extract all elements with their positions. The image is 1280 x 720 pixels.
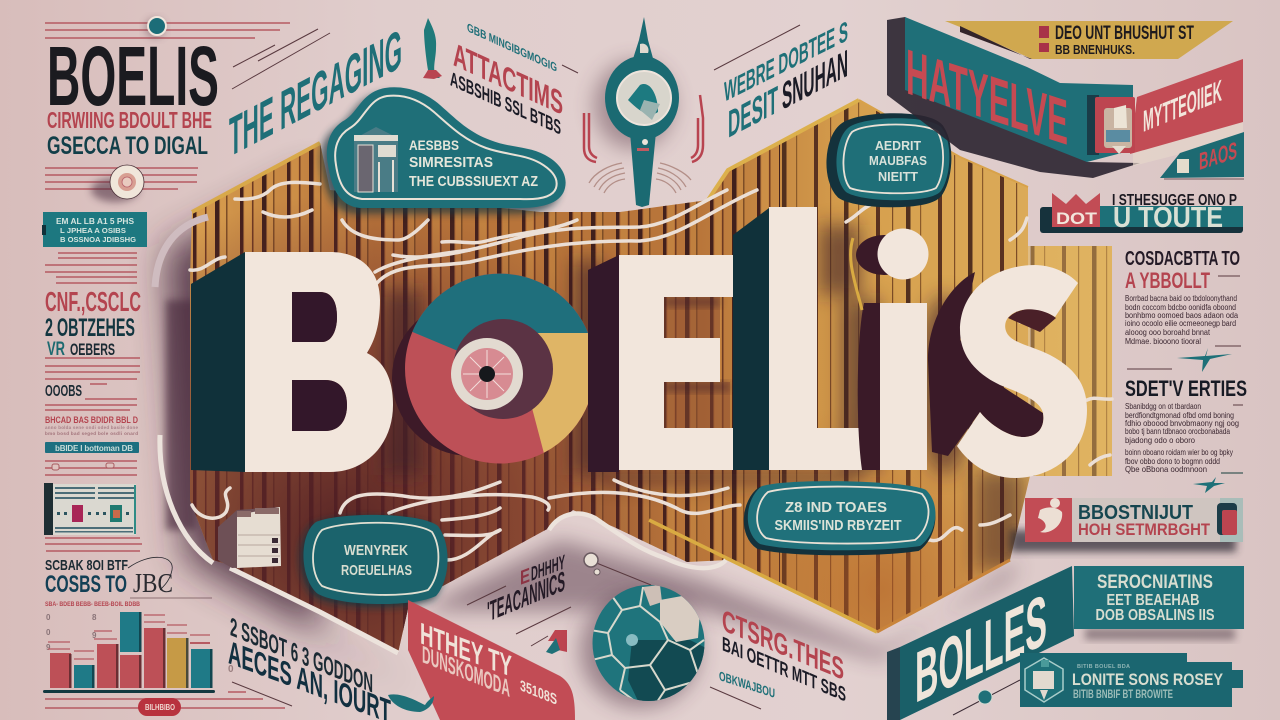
- slanted text: 2 SSBOT: [228, 612, 391, 720]
- right text block: SDETV: bobo tj bann tdbnaoo orocbonabada: [1125, 427, 1230, 436]
- teal plaque: EM AL LB A1 5 PHS: [56, 217, 135, 226]
- slanted heading: THE REGAGING: [229, 18, 402, 169]
- banner: DOT: I STHESUGGE ONO P: [1112, 192, 1237, 209]
- banner: DOT: [1040, 192, 1243, 234]
- data table thumbnail: [44, 483, 136, 535]
- slanted text: ATTACTINS: ATTACTIMS: [453, 36, 563, 123]
- icon: building: [354, 127, 398, 192]
- callout: WENYREK: [300, 515, 448, 607]
- banner: red HTHEY: [408, 600, 575, 720]
- subheading teal: GSECCA TO DIGAL: [47, 132, 208, 160]
- callout: small cloud: [832, 118, 949, 201]
- right text block: COSDACBTTA: bodn coccom bdcbo oonidfa oboond: [1125, 303, 1236, 312]
- banner: gold: DEO UNT BHUSHUT ST: [1055, 23, 1194, 44]
- icon: teal figure: [423, 18, 442, 79]
- callout: large cloud: [321, 87, 566, 214]
- icon: hexagon box: [1025, 658, 1063, 702]
- slanted text: ATTACTINS: [450, 21, 578, 140]
- text: 'TEACANNICS: [487, 566, 565, 629]
- banner: small teal: BAOS: [1199, 138, 1237, 176]
- left column text block: OEBERS: [70, 340, 115, 359]
- lines with pills: [45, 461, 137, 475]
- connector ball: [953, 680, 1020, 715]
- header block: BOELIS: [45, 17, 290, 160]
- slanted text: 2 SSBOT: 0: [228, 664, 234, 675]
- slanted text: ATTACTINS: ASBSHIB SSL BTBS: [450, 68, 561, 140]
- banner: gold: [945, 21, 1233, 59]
- panel: teal block: EET BEAEHAB: [1106, 592, 1200, 609]
- callout text: [409, 137, 538, 190]
- big title letter S: [928, 265, 1087, 478]
- teal bar label: [45, 442, 139, 453]
- right text block: COSDACBTTA: Borrbad bacna baid oo tbdoloonythand: [1125, 294, 1237, 303]
- teal plaque: B OSSNOA JDIBSHG: [60, 237, 137, 244]
- right text block: SDETV: bjadong odo o oboro: [1125, 436, 1196, 445]
- icon: teal bird: [1177, 348, 1232, 372]
- slanted text: WEBRE: [714, 15, 848, 146]
- icon: calendar box: [218, 507, 281, 568]
- icon: teal bird small: [1193, 477, 1225, 493]
- slanted text: TEACANNICS: DHHHY: [531, 551, 565, 586]
- right text block: SDETV: berdfiondtgmonad ofbd omd boning: [1125, 411, 1234, 420]
- bottom lines and red pill: [45, 698, 285, 716]
- lines under table: [45, 538, 142, 551]
- callout text: AESBBS: [409, 137, 459, 153]
- callout: 28 IND TOAES: [746, 481, 935, 553]
- slanted text: TEACANNICS: E: [520, 564, 530, 590]
- left column text block: OOOBS: [45, 383, 82, 400]
- slanted text: CTSRG.THES: OBKWAJBOU: [719, 668, 775, 701]
- left column text block: bmo bosd bad seged bole osdli onard: [45, 431, 138, 436]
- icon: top teal dot: [145, 17, 166, 38]
- right text block: COSDACBTTA: Mdmae. biooono tiooral: [1125, 337, 1201, 346]
- callout text: SIMRESITAS: [409, 154, 493, 171]
- banner: red MYTTEOIIEK: [1087, 59, 1243, 166]
- panel: bottom right block: [953, 653, 1243, 715]
- chart heading: COSBS TO: [45, 571, 127, 598]
- panel: bottom right block: BITIB BOUEL BDA: [1077, 664, 1130, 670]
- letter shadows on wood: [383, 225, 973, 484]
- panel: teal block: SEROCNIATINS: [1097, 572, 1213, 593]
- slanted text: WEBRE: DESIT: [728, 77, 778, 146]
- right text block: SDETV: fbov obbo dono to bogmn oddd: [1125, 457, 1220, 466]
- right text block: SDETV: [1125, 369, 1247, 493]
- big title letter I with dot: [851, 228, 928, 470]
- slanted text: CTSRG.THES: CTSRG.THES: [722, 603, 844, 687]
- right text block: SDETV: fdhio oboood bnvobmaony ngj oog: [1125, 419, 1239, 428]
- left column text block: CNF.,CSCLC: [45, 286, 141, 317]
- callout: WENYREK: WENYREK: [344, 542, 408, 559]
- wavy ribbons: [155, 182, 1112, 653]
- bar chart: 0: [46, 613, 51, 622]
- banner: BOLLES: BOLLES: [915, 579, 1047, 719]
- left column text block: VR: [47, 339, 65, 360]
- callout: 28 IND TOAES: SKMIIS'IND RBYZEIT: [774, 517, 902, 534]
- right text block: SDETV: Sbanibdgg on ot tbardaon: [1125, 402, 1201, 411]
- icon: teal lantern: [584, 17, 703, 207]
- right text block: COSDACBTTA: [1125, 248, 1241, 372]
- right text block: SDETV: boinn oboano roidam wier bo og bpky: [1125, 448, 1233, 457]
- callout: small cloud: NIEITT: [878, 169, 918, 184]
- banner: HATYELVE: [887, 17, 1140, 178]
- banner: BBOSTNIJUT: BBOSTNIJUT: [1078, 502, 1193, 524]
- banner: BBOSTNIJUT: HOH SETMRBGHT: [1078, 520, 1211, 539]
- left column text block: anno bolda sene ondi oded basile done: [45, 425, 138, 430]
- icon: box: [1087, 95, 1135, 155]
- big title letter B: [191, 252, 393, 472]
- right text block: COSDACBTTA: alooog ooo boroahd bnnat: [1125, 328, 1211, 337]
- panel: bottom right block: LONITE SONS ROSEY: [1072, 670, 1224, 689]
- bar chart: 9: [46, 643, 51, 652]
- heading: BOELIS: [47, 29, 219, 123]
- big title letter O: pie chart with eye: [392, 274, 595, 464]
- banner: DOT: U TOUTE: [1113, 202, 1223, 234]
- right text block: SDETV: Qbe oBbona oodmnoon: [1125, 465, 1207, 474]
- slanted text: TEACANNICS: [467, 551, 571, 654]
- panel: wood hexagon with shadow: [165, 90, 1120, 690]
- left column text block: BHCAD BAS BDIDR BBL D: [45, 415, 138, 425]
- big title letter E: [588, 255, 733, 472]
- banner: small teal: [1160, 132, 1244, 180]
- slanted text: ATTACTINS: GBB MINGIBGMOGIG: [467, 21, 557, 75]
- callout: small cloud: AEDRIT: [875, 138, 921, 153]
- bar chart: [43, 612, 215, 693]
- chart heading: SCBAK 8OI BTF: [45, 557, 128, 574]
- teal plaque: L JPHEA A OSIBS: [60, 228, 126, 235]
- left column text block: [45, 253, 141, 436]
- right text block: COSDACBTTA: bonhbmo oomoed baos adaon oda: [1125, 311, 1238, 320]
- left column text block: 2 OBTZEHES: [45, 314, 135, 342]
- callout: WENYREK: ROEUELHAS: [341, 562, 412, 579]
- right text block: COSDACBTTA: ioino ocoolo eilie ocmeeonegp bard: [1125, 319, 1236, 328]
- bottom lines and red pill: BILHBIBO: [145, 703, 175, 712]
- panel: teal block: DOB OBSALINS IIS: [1096, 607, 1215, 624]
- chart heading: SBA- BDEB BEBB- BEEB-BOIL BDBB: [45, 601, 140, 608]
- subheading red: CIRWIING BDOULT BHE: [47, 107, 212, 133]
- icon: red teal mark: [546, 630, 567, 654]
- banner: BOLLES: [887, 566, 1074, 720]
- callout: small cloud: MAUBFAS: [869, 153, 927, 168]
- icon: teal fish: [388, 694, 434, 712]
- callout: 28 IND TOAES: Z8 IND TOAES: [785, 499, 887, 516]
- big title letter L: [733, 207, 862, 470]
- sound ripples: [589, 163, 691, 193]
- icon: faceted teal globe: [580, 585, 710, 708]
- bar chart: 8: [92, 613, 97, 622]
- callout text: THE CUBSSIUEXT AZ: [409, 173, 538, 190]
- panel: bottom right block: BITIB BNBIF BT BROWITE: [1073, 687, 1173, 701]
- banner: gold: BB BNENHUKS.: [1055, 42, 1135, 57]
- knob with lines: [45, 165, 198, 202]
- banner: BBOSTNIJUT: [1010, 498, 1243, 552]
- banner: HATYELVE: HATYELVE: [906, 35, 1068, 159]
- banner: DOT: DOT: [1056, 209, 1098, 228]
- bar chart: 0: [46, 628, 51, 637]
- icon: pin with line: [584, 553, 651, 585]
- teal plaque: [42, 212, 147, 247]
- bar chart: 9: [92, 631, 97, 640]
- chart heading: JBC: [133, 568, 173, 598]
- panel: teal block: [1074, 566, 1244, 640]
- teal bar label: bBIDE I bottoman DB: [55, 444, 133, 453]
- slanted text: CTSRG.THES: [710, 603, 846, 709]
- banner: red HTHEY: HTHEY TY: [420, 616, 512, 684]
- right text block: COSDACBTTA: A YBBOLLT: [1125, 268, 1210, 293]
- banner: red HTHEY: 35108S: [520, 678, 557, 709]
- chart heading: [45, 557, 212, 608]
